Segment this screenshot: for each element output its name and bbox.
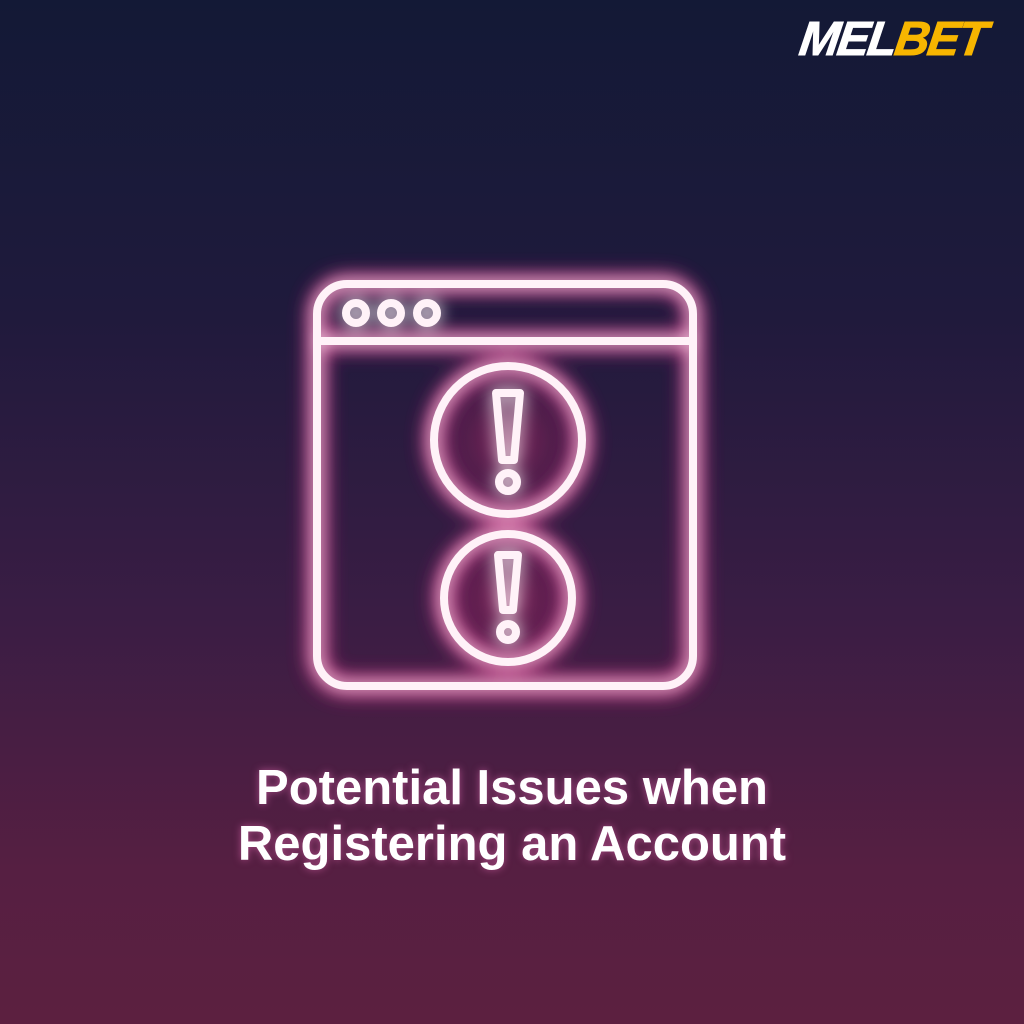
warning 1 <box>434 366 582 514</box>
title: Registering an Account <box>238 817 786 871</box>
title <box>236 761 788 874</box>
window frame <box>317 284 693 686</box>
title: Potential Issues when <box>256 761 768 815</box>
window dots <box>346 303 437 323</box>
logo: MELBET: MELBET <box>796 13 989 66</box>
warning 2 <box>444 534 572 662</box>
